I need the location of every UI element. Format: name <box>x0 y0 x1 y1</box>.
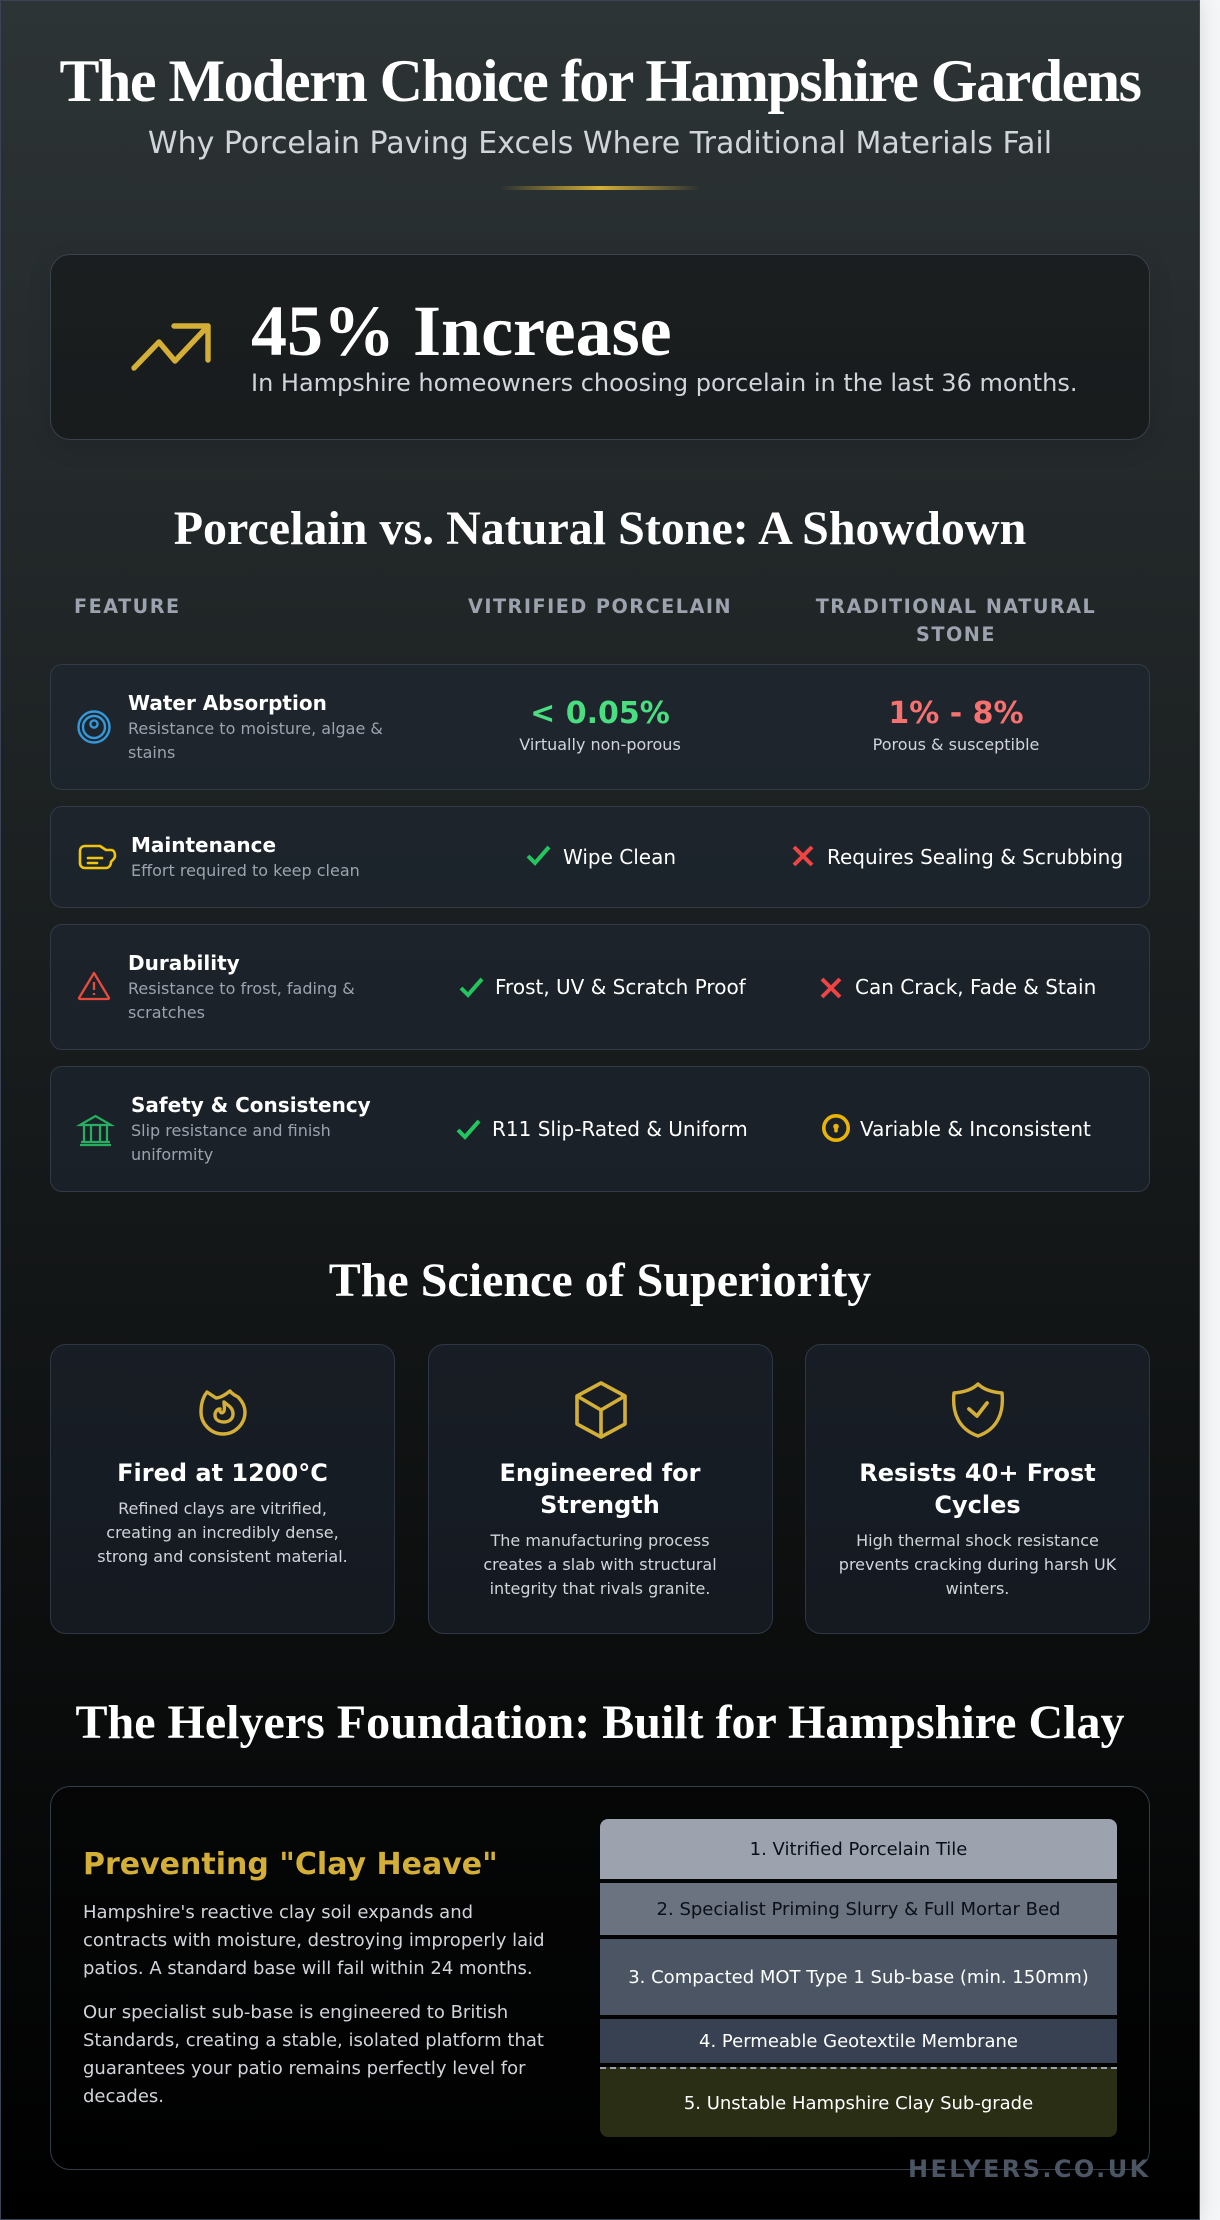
card text: strong and consistent material. <box>97 1547 348 1566</box>
card text: prevents cracking during harsh UK <box>839 1555 1116 1574</box>
title: The Modern Choice for Hampshire Gardens <box>60 48 1140 114</box>
heading: science: The Science of Superiority <box>329 1254 871 1307</box>
card title: Strength <box>540 1491 660 1519</box>
card text: creates a slab with structural <box>483 1555 717 1574</box>
layer 1 <box>600 1819 1117 1879</box>
feature description: stains <box>128 743 175 762</box>
card text <box>97 1499 348 1566</box>
icon: maintenance tag <box>78 844 116 870</box>
icon: bank building <box>76 1114 115 1146</box>
card text: The manufacturing process <box>490 1531 710 1550</box>
layer 4 <box>600 2019 1117 2063</box>
layer 4: 4. Permeable Geotextile Membrane <box>699 2031 1018 2052</box>
feature description: scratches <box>128 1003 205 1022</box>
porcelain check <box>456 1120 480 1140</box>
foundation paragraph two: guarantees your patio remains perfectly level for <box>83 2058 526 2079</box>
card text <box>483 1531 717 1598</box>
stone text: Requires Sealing & Scrubbing <box>827 845 1123 869</box>
layer 2 <box>600 1883 1117 1935</box>
card title <box>500 1459 700 1519</box>
stone cross <box>820 978 842 998</box>
table header: traditional natural stone: STONE <box>916 623 996 646</box>
feature description: Resistance to frost, fading & <box>128 979 355 998</box>
card text <box>839 1531 1116 1598</box>
foundation subheading: Preventing "Clay Heave" <box>83 1847 498 1882</box>
table header: feature: FEATURE <box>74 595 181 618</box>
layer 3: 3. Compacted MOT Type 1 Sub-base (min. 150mm) <box>628 1967 1089 1988</box>
feature title: Water Absorption <box>128 691 327 715</box>
layer 3 <box>600 1939 1117 2015</box>
foundation paragraph one: Hampshire's reactive clay soil expands and <box>83 1902 473 1923</box>
table header: vitrified porcelain: VITRIFIED PORCELAIN <box>468 595 732 618</box>
foundation paragraph one: contracts with moisture, destroying improperly laid <box>83 1930 545 1951</box>
card text: Refined clays are vitrified, <box>118 1499 327 1518</box>
porcelain text: Wipe Clean <box>563 845 676 869</box>
icon: warning triangle <box>78 972 110 1000</box>
stat description: In Hampshire homeowners choosing porcelain in the last 36 months. <box>251 369 1078 397</box>
feature description <box>128 979 355 1022</box>
stone note: Porous & susceptible <box>873 735 1039 754</box>
feature description <box>128 719 383 762</box>
layer 5 clay <box>600 2067 1117 2137</box>
card text: winters. <box>946 1579 1009 1598</box>
porcelain value: < 0.05% <box>530 696 670 731</box>
layer diagram <box>600 1819 1117 2137</box>
porcelain note: Virtually non-porous <box>519 735 681 754</box>
stone value: 1% - 8% <box>888 696 1024 731</box>
card title: Cycles <box>934 1491 1021 1519</box>
porcelain text: R11 Slip-Rated & Uniform <box>492 1117 748 1141</box>
panel: resists frost cycles <box>805 1344 1150 1634</box>
row: water absorption <box>50 664 1150 790</box>
gold divider <box>500 186 700 190</box>
row: maintenance <box>50 806 1150 908</box>
icon: cube <box>575 1381 627 1439</box>
foundation paragraph two: Our specialist sub-base is engineered to British <box>83 2002 508 2023</box>
panel: engineered for strength <box>428 1344 772 1634</box>
feature description: Effort required to keep clean <box>131 861 360 880</box>
foundation paragraph two <box>83 2002 544 2107</box>
stone cross <box>792 846 814 866</box>
feature title: Safety & Consistency <box>131 1093 371 1117</box>
row: durability <box>50 924 1150 1050</box>
icon: trending up arrow <box>131 323 211 371</box>
feature title: Maintenance <box>131 833 276 857</box>
table header: traditional natural stone <box>816 595 1096 646</box>
icon: water target <box>77 710 111 744</box>
porcelain check <box>526 846 550 866</box>
card text: integrity that rivals granite. <box>490 1579 710 1598</box>
feature title: Durability <box>128 951 240 975</box>
porcelain text: Frost, UV & Scratch Proof <box>495 975 746 999</box>
icon: flame <box>199 1389 247 1436</box>
foundation paragraph one <box>83 1902 545 1979</box>
layer 1: 1. Vitrified Porcelain Tile <box>750 1839 967 1860</box>
layer 5 clay: 5. Unstable Hampshire Clay Sub-grade <box>684 2093 1033 2114</box>
watermark: HELYERS.CO.UK <box>908 2155 1151 2183</box>
heading: showdown: Porcelain vs. Natural Stone: A Showdown <box>174 502 1026 555</box>
porcelain check <box>460 978 484 998</box>
layer 2: 2. Specialist Priming Slurry & Full Mortar Bed <box>657 1899 1060 1920</box>
icon: shield check <box>952 1382 1004 1438</box>
card title: Resists 40+ Frost <box>859 1459 1096 1487</box>
feature description: Slip resistance and finish <box>131 1121 331 1140</box>
feature description <box>131 1121 331 1164</box>
card title: Fired at 1200°C <box>117 1459 328 1487</box>
table header: traditional natural stone: TRADITIONAL NATURAL <box>816 595 1096 618</box>
feature description: uniformity <box>131 1145 213 1164</box>
card title <box>859 1459 1096 1519</box>
card text: High thermal shock resistance <box>856 1531 1099 1550</box>
stone text: Can Crack, Fade & Stain <box>855 975 1096 999</box>
panel: fired at 1200C <box>50 1344 395 1634</box>
feature description: Resistance to moisture, algae & <box>128 719 383 738</box>
heading: foundation: The Helyers Foundation: Built for Hampshire Clay <box>76 1696 1124 1749</box>
foundation paragraph one: patios. A standard base will fail within 24 months. <box>83 1958 533 1979</box>
panel: 45% increase stat <box>50 254 1150 440</box>
card text: creating an incredibly dense, <box>106 1523 339 1542</box>
stat headline: 45% Increase <box>251 291 672 371</box>
foundation paragraph two: decades. <box>83 2086 164 2107</box>
panel: foundation <box>50 1786 1150 2170</box>
row: safety and consistency <box>50 1066 1150 1192</box>
foundation paragraph two: Standards, creating a stable, isolated platform that <box>83 2030 544 2051</box>
card title: Engineered for <box>500 1459 700 1487</box>
stone caution icon <box>822 1114 850 1142</box>
subtitle: Why Porcelain Paving Excels Where Traditional Materials Fail <box>148 126 1052 161</box>
stone text: Variable & Inconsistent <box>860 1117 1091 1141</box>
